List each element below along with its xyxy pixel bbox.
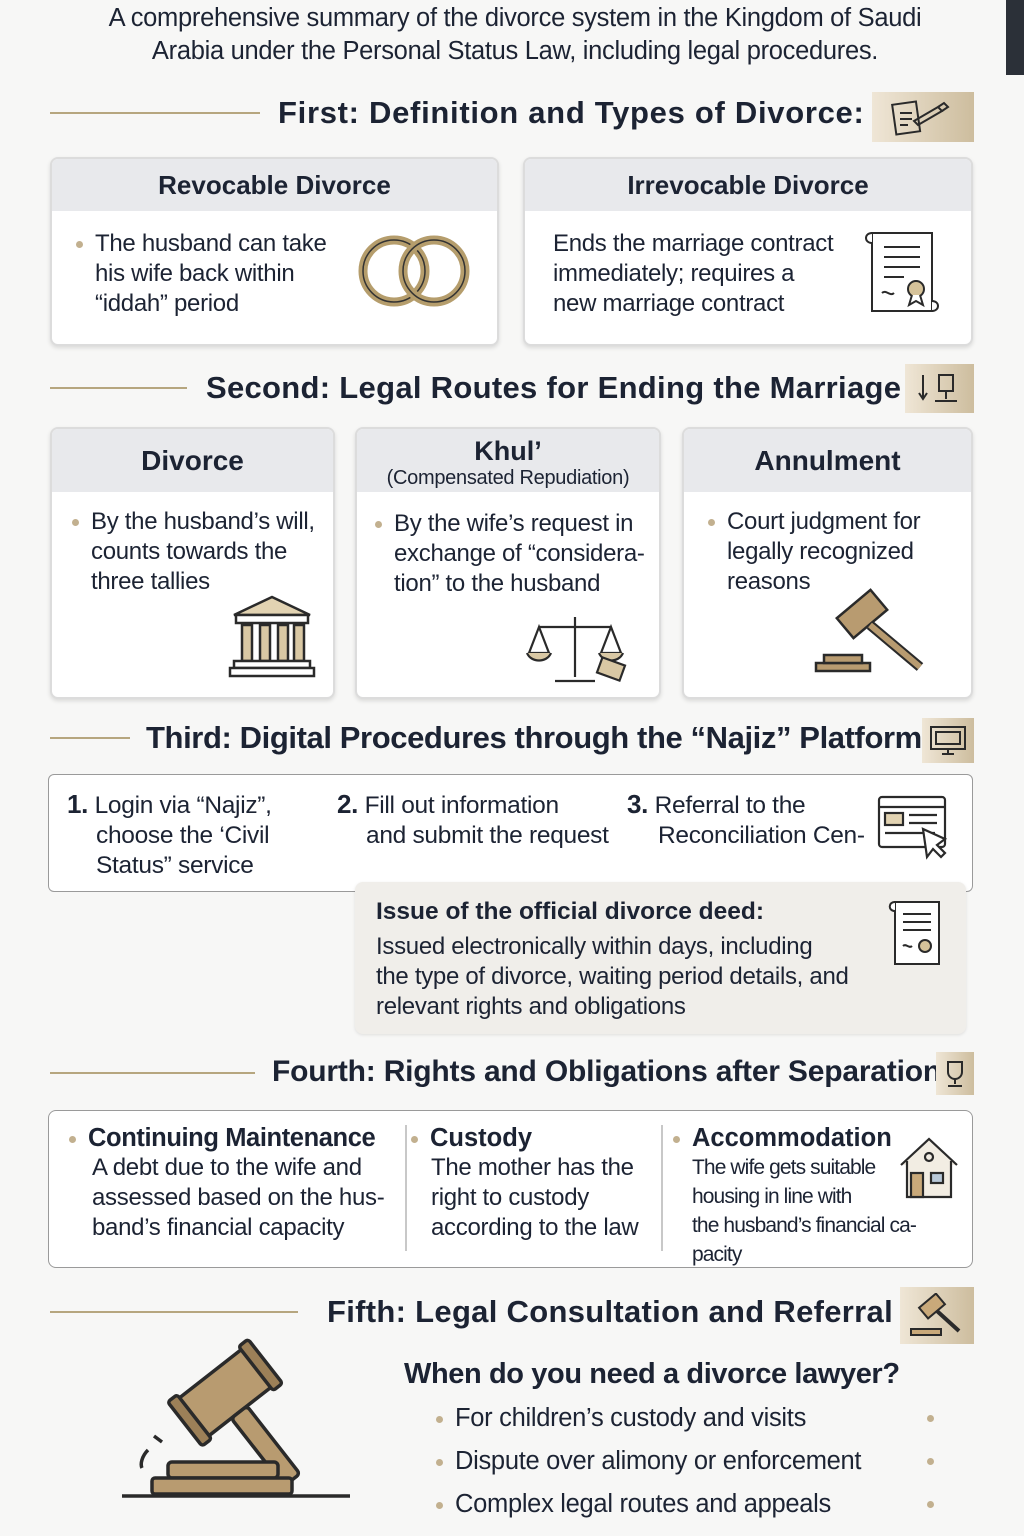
- card: divorce: three tallies: [91, 568, 210, 595]
- step 3: 3. Referral to the: [627, 789, 805, 819]
- icon: courthouse: [228, 596, 316, 678]
- section 2 heading: [50, 364, 974, 413]
- card: revocable divorce: [50, 157, 499, 346]
- icon: house: [900, 1138, 958, 1198]
- icon: rings: [358, 236, 470, 306]
- right: accommodation: housing in line with: [692, 1185, 851, 1208]
- icon: gavel tab: [900, 1287, 974, 1344]
- step 1: Status” service: [96, 852, 254, 879]
- card: irrevocable divorce: new marriage contract: [553, 290, 784, 317]
- right: accommodation: pacity: [692, 1243, 741, 1266]
- section 5 heading: [50, 1287, 974, 1344]
- lawyer heading: When do you need a divorce lawyer?: [404, 1358, 900, 1390]
- lawyer bullets: Dispute over alimony or enforcement: [455, 1447, 861, 1475]
- deed box: relevant rights and obligations: [376, 993, 686, 1020]
- card: divorce: counts towards the: [91, 538, 287, 565]
- card: divorce: [50, 427, 335, 699]
- steps box: [48, 774, 973, 892]
- deed box: Issue of the official divorce deed:: [376, 898, 764, 925]
- right: maintenance: band’s financial capacity: [92, 1214, 344, 1241]
- section 3 heading: Third: Digital Procedures through the “Najiz” Platform: [146, 720, 922, 755]
- lawyer bullets: [436, 1404, 934, 1518]
- step 2: 2. Fill out information: [337, 789, 559, 819]
- card: irrevocable divorce: Irrevocable Divorce: [627, 170, 869, 200]
- section 4 heading: Fourth: Rights and Obligations after Separation: [272, 1055, 941, 1088]
- section 1 heading: [50, 92, 974, 142]
- subtitle: A comprehensive summary of the divorce system in the Kingdom of Saudi: [109, 4, 921, 32]
- right: custody: [411, 1124, 639, 1241]
- lawyer bullets: Complex legal routes and appeals: [455, 1490, 831, 1518]
- right: custody: The mother has the: [431, 1154, 634, 1181]
- icon: scales with envelope: [526, 617, 626, 682]
- card: khul: exchange of “considera-: [394, 540, 645, 567]
- right: maintenance: [69, 1124, 384, 1241]
- card: irrevocable divorce: immediately; requires a: [553, 260, 794, 287]
- section 2 heading: Second: Legal Routes for Ending the Marriage: [206, 370, 901, 405]
- deed box: Issued electronically within days, including: [376, 933, 812, 960]
- section 3 heading: [50, 718, 974, 763]
- step 3: [627, 789, 865, 849]
- deed box: [355, 882, 966, 1034]
- step 1: 1. Login via “Najiz”,: [67, 789, 272, 819]
- card: revocable divorce: The husband can take: [95, 230, 327, 257]
- big gavel illustration: [122, 1338, 350, 1498]
- card: irrevocable divorce: [523, 157, 973, 346]
- icon: deed scroll: [888, 901, 940, 965]
- right: maintenance: A debt due to the wife and: [92, 1154, 362, 1181]
- card: divorce: Divorce: [141, 445, 244, 476]
- card: annulment: Court judgment for: [727, 508, 920, 535]
- icon: gavel: [814, 588, 924, 672]
- deed box: the type of divorce, waiting period details, and: [376, 963, 849, 990]
- right: accommodation: Accommodation: [692, 1124, 892, 1152]
- step 1: choose the ‘Civil: [96, 822, 269, 849]
- subtitle: Arabia under the Personal Status Law, including legal procedures.: [152, 37, 878, 65]
- rights box: [48, 1110, 973, 1268]
- card: revocable divorce: Revocable Divorce: [158, 170, 391, 200]
- card: khul: [355, 427, 661, 699]
- lawyer bullets: For children’s custody and visits: [455, 1404, 806, 1432]
- icon: monitor: [922, 718, 974, 763]
- right: custody: according to the law: [431, 1214, 638, 1241]
- card: annulment: [682, 427, 973, 699]
- step 3: Reconciliation Cen-: [658, 822, 865, 849]
- icon: document and pen: [872, 92, 974, 142]
- step 2: [337, 789, 609, 849]
- right: accommodation: The wife gets suitable: [692, 1156, 875, 1179]
- card: khul: Khul’: [474, 436, 542, 466]
- card: khul: (Compensated Repudiation): [387, 467, 629, 489]
- card: annulment: legally recognized: [727, 538, 914, 565]
- card: divorce: By the husband’s will,: [91, 508, 315, 535]
- icon: scales tab: [905, 364, 974, 413]
- right: maintenance: assessed based on the hus-: [92, 1184, 384, 1211]
- card: annulment: Annulment: [754, 445, 901, 476]
- right: custody: right to custody: [431, 1184, 589, 1211]
- section 5 heading: Fifth: Legal Consultation and Referral: [327, 1294, 893, 1329]
- right: custody: Custody: [430, 1124, 532, 1152]
- dark edge bar: [1006, 0, 1024, 75]
- right: maintenance: Continuing Maintenance: [88, 1124, 375, 1152]
- icon: web form with cursor: [878, 796, 948, 860]
- right: accommodation: [673, 1124, 916, 1266]
- section 1 heading: First: Definition and Types of Divorce:: [278, 95, 864, 130]
- step 2: and submit the request: [366, 822, 609, 849]
- card: revocable divorce: his wife back within: [95, 260, 294, 287]
- card: khul: By the wife’s request in: [394, 510, 633, 537]
- icon: certificate scroll: [865, 232, 939, 312]
- subtitle: [108, 4, 921, 65]
- icon: trophy: [936, 1052, 974, 1095]
- card: revocable divorce: “iddah” period: [95, 290, 239, 317]
- card: irrevocable divorce: Ends the marriage contract: [553, 230, 833, 257]
- right: accommodation: the husband’s financial ca-: [692, 1214, 916, 1237]
- card: annulment: reasons: [727, 568, 810, 595]
- section 4 heading: [50, 1052, 974, 1095]
- step 1: [67, 789, 272, 879]
- card: khul: tion” to the husband: [394, 570, 600, 597]
